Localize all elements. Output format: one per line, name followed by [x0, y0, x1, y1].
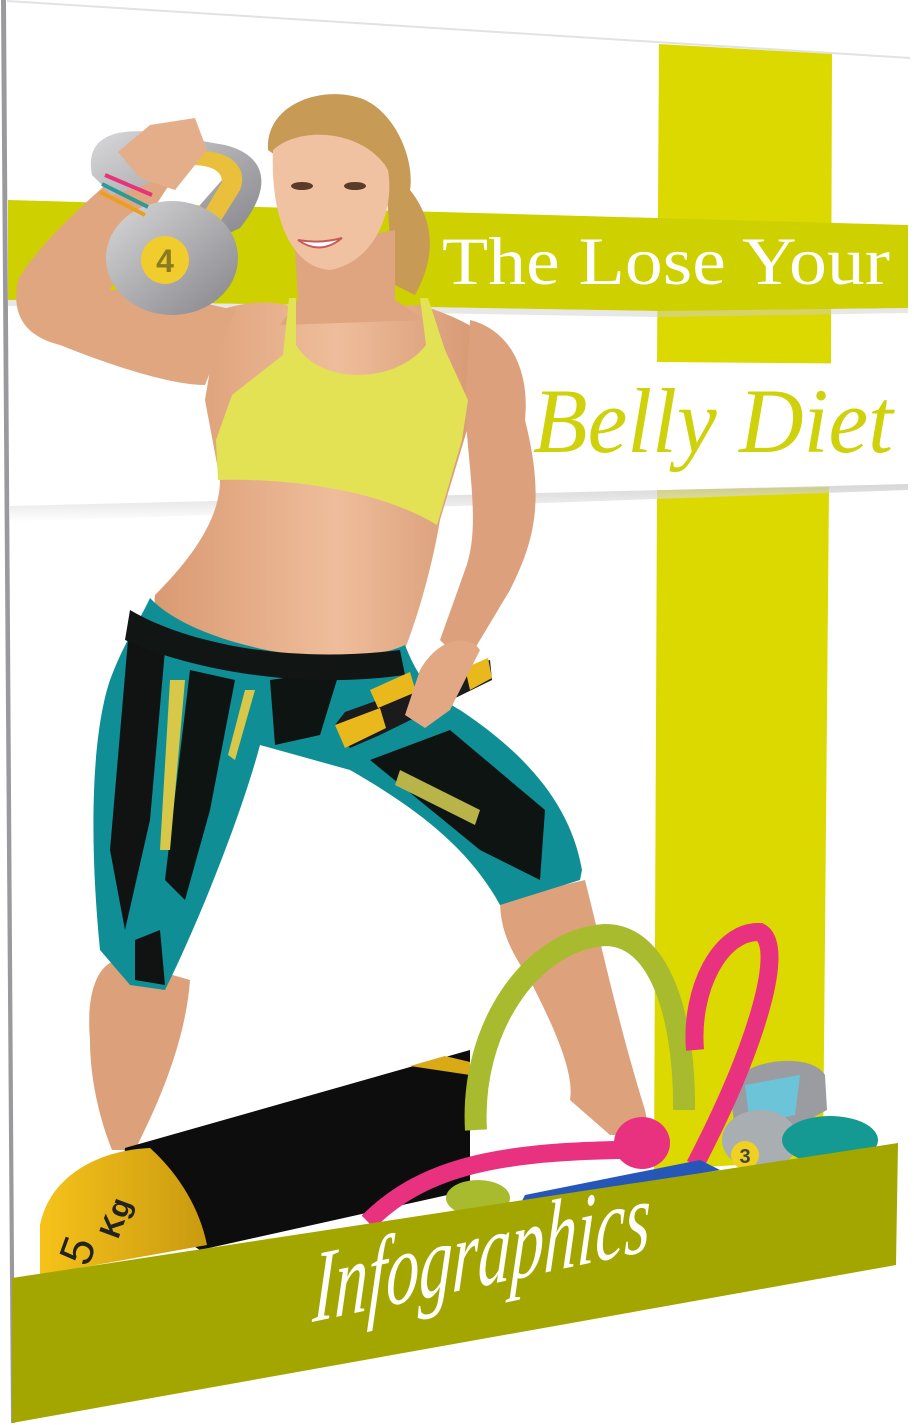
bottom band: Infographics [311, 1159, 653, 1344]
vertical yellow band [654, 44, 832, 1170]
right arm [440, 320, 536, 665]
small kettlebells and balls [722, 1061, 878, 1170]
pink arch [694, 932, 770, 1165]
bottom band [12, 1143, 898, 1423]
green wheel [446, 1180, 510, 1216]
hand on kettlebell [118, 118, 207, 190]
bracelets [100, 175, 152, 215]
kettlebell [91, 131, 261, 315]
green arch [476, 935, 684, 1130]
front leg [500, 880, 650, 1135]
title band: The Lose Your [8, 200, 908, 317]
eyes [291, 182, 366, 190]
torso [155, 302, 520, 665]
sandbag [40, 1050, 470, 1275]
subtitle band: Belly Diet: Belly Diet [533, 370, 895, 472]
small kettlebells and balls: 3 [739, 1146, 751, 1168]
leggings [93, 598, 582, 990]
blue massager [520, 1160, 720, 1205]
yellow sports top [216, 298, 468, 525]
sandbag: Kg [94, 1194, 138, 1242]
pink hoop tube [368, 1150, 620, 1222]
back leg [89, 960, 190, 1150]
pink dumbbell [614, 1117, 670, 1169]
raised arm [16, 150, 235, 385]
hair [268, 94, 430, 295]
smile [298, 238, 342, 248]
subtitle band: Belly Diet [10, 362, 908, 522]
hand with dumbbells [335, 640, 492, 748]
figure: woman [16, 94, 650, 1150]
kettlebell: 4 [156, 243, 174, 279]
title band: The Lose Your: The Lose Your [442, 223, 890, 299]
face [273, 135, 389, 270]
neck [280, 230, 425, 325]
sandbag: 5 [49, 1230, 106, 1271]
